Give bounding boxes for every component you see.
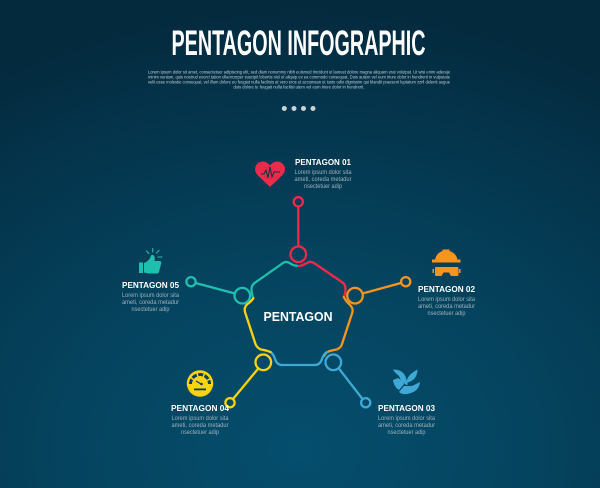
label: pentagon 02: nsectetuer adip bbox=[428, 311, 466, 317]
spoke: blue 03 bbox=[326, 354, 370, 407]
intro text block bbox=[148, 70, 450, 90]
intro text block: velit esse molestie consequat, vel illum dolore eu feugiat nulla facilisis at vero eros et accumsan et iusto odio dignissim qui blandit praesent luptatum zzril delenit augue bbox=[148, 80, 450, 86]
label: pentagon 05: PENTAGON 05 bbox=[122, 280, 179, 290]
icon: hard hat and goggles bbox=[432, 250, 460, 276]
label: pentagon 04: nsectetuer adip bbox=[181, 430, 220, 436]
spoke: orange 02 bbox=[347, 277, 410, 304]
segment: yellow left bbox=[245, 298, 270, 352]
label: pentagon 04: PENTAGON 04 bbox=[171, 403, 229, 413]
pentagon diagram bbox=[186, 197, 410, 407]
label: pentagon 05: nsectetuer adip bbox=[132, 307, 170, 313]
intro text block: minim veniam, quis nostrud exerci tation ullamcorper suscipit lobortis nisl ut aliquip ex ea commodo consequat. Duis autem vel eum iriure dolor in hendrerit in vulputate bbox=[148, 74, 450, 80]
label: pentagon 03 bbox=[378, 403, 436, 436]
intro text block: Lorem ipsum dolor sit amet, consectetuer adipiscing elit, sed diam nonummy nibh euismod tincidunt ut laoreet dolore magna aliquam erat volutpat. Ut wisi enim aderaje bbox=[148, 70, 450, 76]
segment: orange right bbox=[324, 297, 353, 356]
pagination dots bbox=[282, 106, 316, 111]
label: pentagon 05 bbox=[122, 280, 180, 313]
label: pentagon 01: PENTAGON 01 bbox=[295, 157, 351, 167]
segment: blue bottom bbox=[270, 352, 327, 365]
spoke: teal 05 bbox=[186, 277, 250, 304]
intro text block: duis dolore te feugait nulla facilisi utem vel eum iriure dolor in hendrerit. bbox=[234, 84, 364, 90]
label: pentagon 01 bbox=[294, 157, 352, 190]
label: pentagon 01: ameti, coreda metadur bbox=[294, 177, 352, 183]
segment: red top right bbox=[298, 262, 346, 297]
label: pentagon 04: Lorem ipsum dolor sita bbox=[172, 416, 229, 422]
label: pentagon 05: Lorem ipsum dolor sita bbox=[122, 293, 180, 299]
label: pentagon 02: ameti, coreda metadur bbox=[418, 304, 475, 310]
icon: plant in hand bbox=[393, 370, 420, 394]
icon: speedometer gauge bbox=[187, 370, 213, 397]
label: pentagon 05: ameti, coreda metadur bbox=[122, 300, 179, 306]
label: pentagon 02: PENTAGON 02 bbox=[418, 284, 475, 294]
label: pentagon 02: Lorem ipsum dolor sita bbox=[418, 297, 476, 303]
segment: teal top left bbox=[251, 262, 298, 298]
icon: thumbs up bbox=[139, 248, 162, 274]
label: pentagon 03: PENTAGON 03 bbox=[378, 403, 435, 413]
label: pentagon 03: nsectetuer adip bbox=[388, 430, 426, 436]
pentagon center label: PENTAGON bbox=[264, 310, 332, 324]
label: pentagon 04: ameti, coreda metadur bbox=[172, 423, 228, 429]
label: pentagon 01: nsectetuer adip bbox=[304, 184, 343, 190]
spoke: yellow 04 bbox=[225, 354, 271, 407]
label: pentagon 03: Lorem ipsum dolor sita bbox=[378, 416, 436, 422]
label: pentagon 04 bbox=[171, 403, 229, 436]
label: pentagon 03: ameti, coreda metadur bbox=[378, 423, 435, 429]
label: pentagon 02 bbox=[418, 284, 476, 317]
icon: heart with pulse bbox=[255, 161, 285, 187]
spoke: red 01 bbox=[290, 197, 306, 262]
label: pentagon 01: Lorem ipsum dolor sita bbox=[294, 170, 352, 176]
